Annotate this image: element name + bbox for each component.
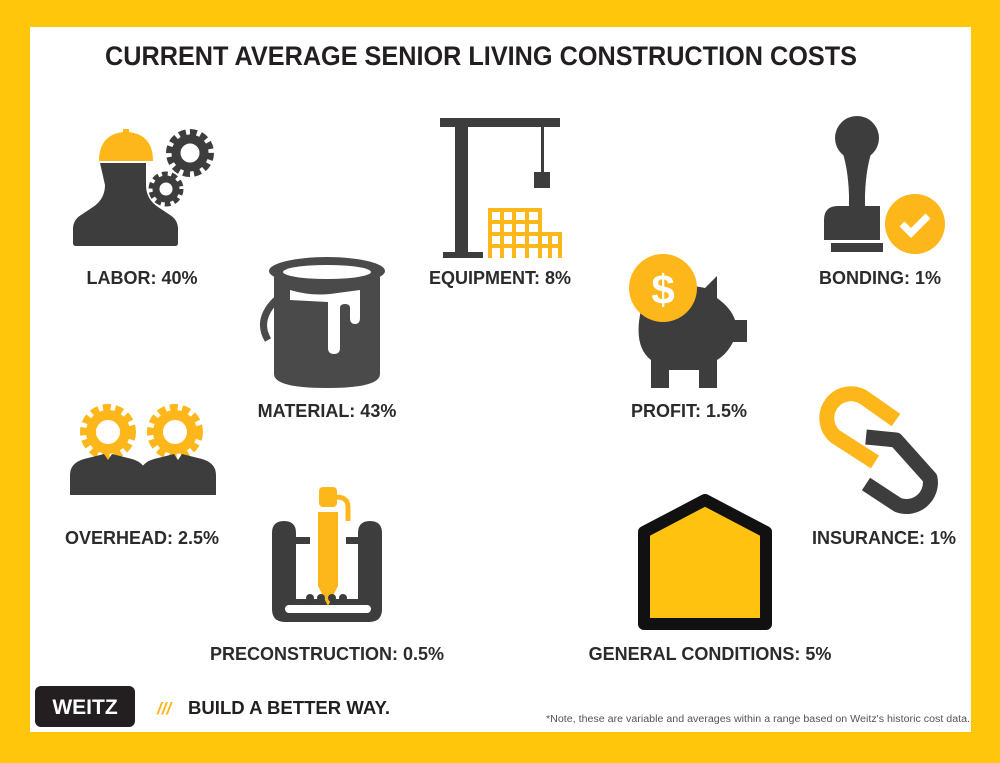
icon: piggy bank: $ (651, 266, 675, 313)
icon: overhead (70, 410, 216, 495)
icon: labor worker (73, 129, 208, 246)
logo: weitz (35, 686, 135, 727)
tagline: /// (156, 699, 173, 718)
icon: crane (440, 118, 560, 258)
icon: house (644, 500, 766, 624)
icon: paint can (264, 257, 385, 388)
logo: weitz: WEITZ (52, 696, 118, 719)
title: CURRENT AVERAGE SENIOR LIVING CONSTRUCTION COSTS (105, 41, 857, 71)
label: overhead: OVERHEAD: 2.5% (65, 528, 219, 548)
label: labor: LABOR: 40% (86, 268, 198, 288)
icon: piggy bank (629, 254, 747, 388)
icon: chain (827, 394, 930, 507)
label: preconstruction: PRECONSTRUCTION: 0.5% (210, 644, 444, 664)
label: insurance: INSURANCE: 1% (812, 528, 956, 548)
footnote: *Note, these are variable and averages within a range based on Weitz's historic cost data. (546, 714, 970, 725)
icon: preconstruction (272, 487, 382, 622)
label: profit: PROFIT: 1.5% (631, 401, 747, 421)
tagline: BUILD A BETTER WAY. (188, 698, 390, 718)
icon: stamp (824, 116, 950, 259)
label: general conditions: GENERAL CONDITIONS: 5% (589, 644, 831, 664)
label: bonding: BONDING: 1% (819, 268, 941, 288)
label: material: MATERIAL: 43% (258, 401, 396, 421)
label: equipment: EQUIPMENT: 8% (429, 268, 571, 288)
